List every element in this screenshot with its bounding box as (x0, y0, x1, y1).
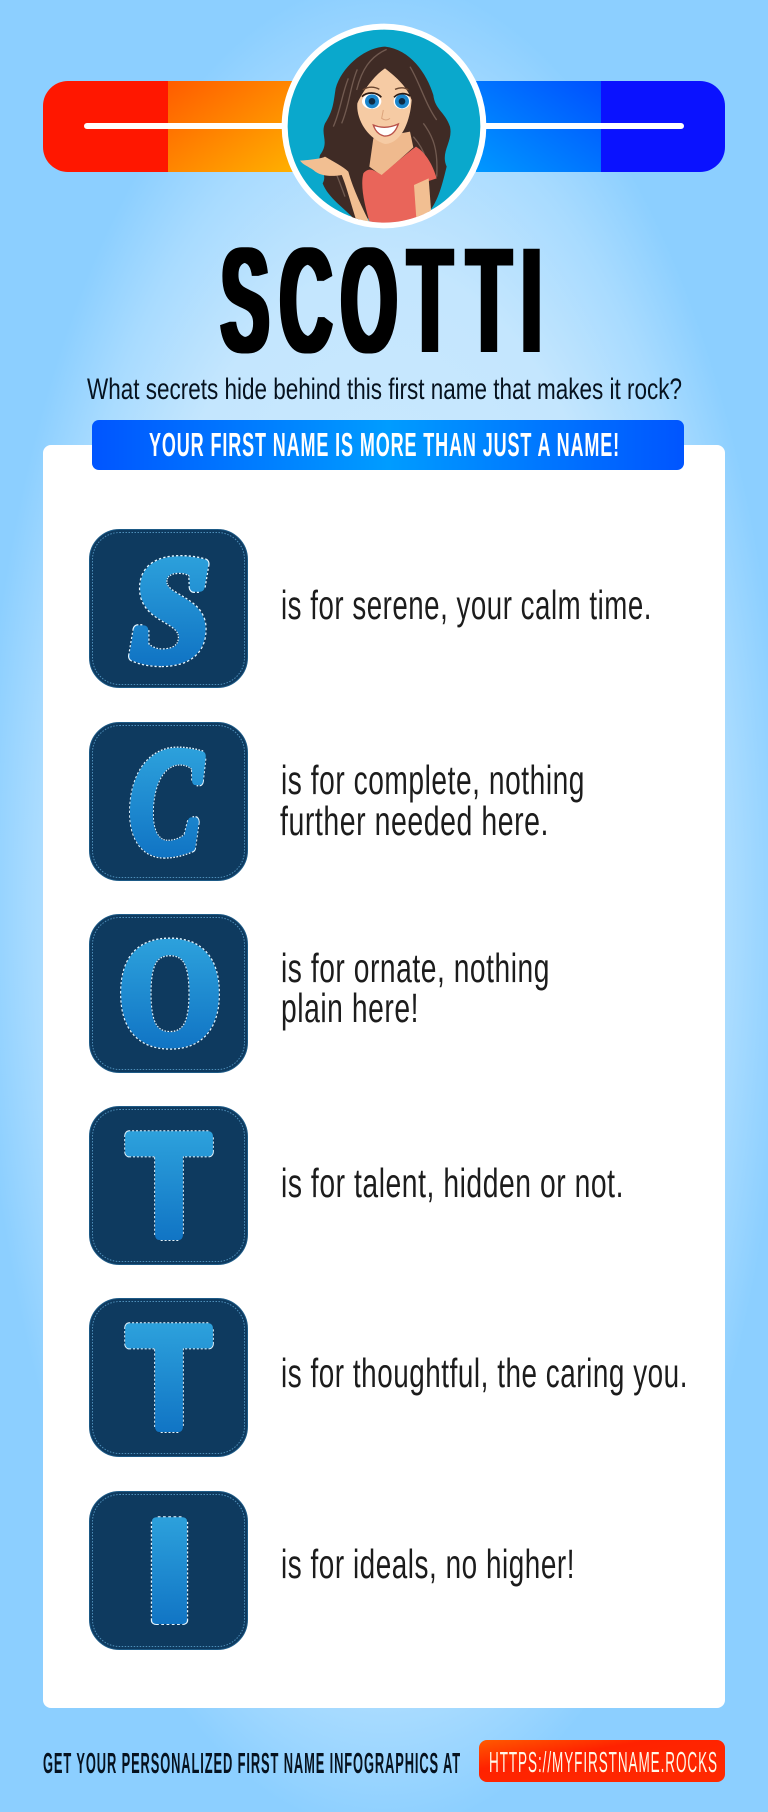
icon S: S (131, 527, 210, 693)
row I (90, 1489, 575, 1651)
footer URL button (479, 1740, 725, 1782)
icon T: T (128, 1104, 210, 1267)
mouth (373, 124, 398, 136)
white line across bar (84, 123, 684, 129)
eyes (362, 94, 381, 109)
portrait: woman avatar in circle (285, 27, 483, 225)
face (357, 68, 412, 144)
icon T: T (128, 1296, 210, 1459)
icon O: O (119, 909, 221, 1075)
row T2 (90, 1296, 688, 1459)
icon O (90, 909, 248, 1075)
row O (90, 909, 550, 1075)
icon S (90, 527, 248, 693)
icon I: I (144, 1489, 195, 1651)
icon I (90, 1489, 248, 1651)
icon I: I (144, 1489, 195, 1651)
row T (90, 1104, 624, 1267)
neck and chest (369, 132, 413, 176)
header gradient bar (43, 81, 725, 172)
main white panel (43, 445, 725, 1708)
row C: further needed here. (280, 798, 549, 844)
arms (414, 178, 431, 217)
text T: is for talent, hidden or not. (281, 1160, 624, 1206)
banner (92, 420, 684, 470)
title: SCOTTI (221, 216, 542, 384)
icon O: O (119, 909, 221, 1075)
text C: is for complete, nothing (281, 757, 585, 803)
icon C (90, 720, 248, 885)
hair (319, 47, 451, 220)
text O: is for ornate, nothing (281, 945, 550, 991)
row O: plain here! (281, 985, 419, 1031)
icon T (90, 1296, 248, 1459)
icon C: C (129, 720, 203, 885)
shirt (362, 147, 437, 223)
icon T: T (128, 1104, 210, 1267)
icon C: C (129, 720, 203, 885)
icon S: S (131, 527, 210, 693)
row S (90, 527, 652, 693)
icon T (90, 1104, 248, 1267)
icon T: T (128, 1296, 210, 1459)
row C (90, 720, 585, 885)
text I: is for ideals, no higher! (281, 1541, 575, 1587)
